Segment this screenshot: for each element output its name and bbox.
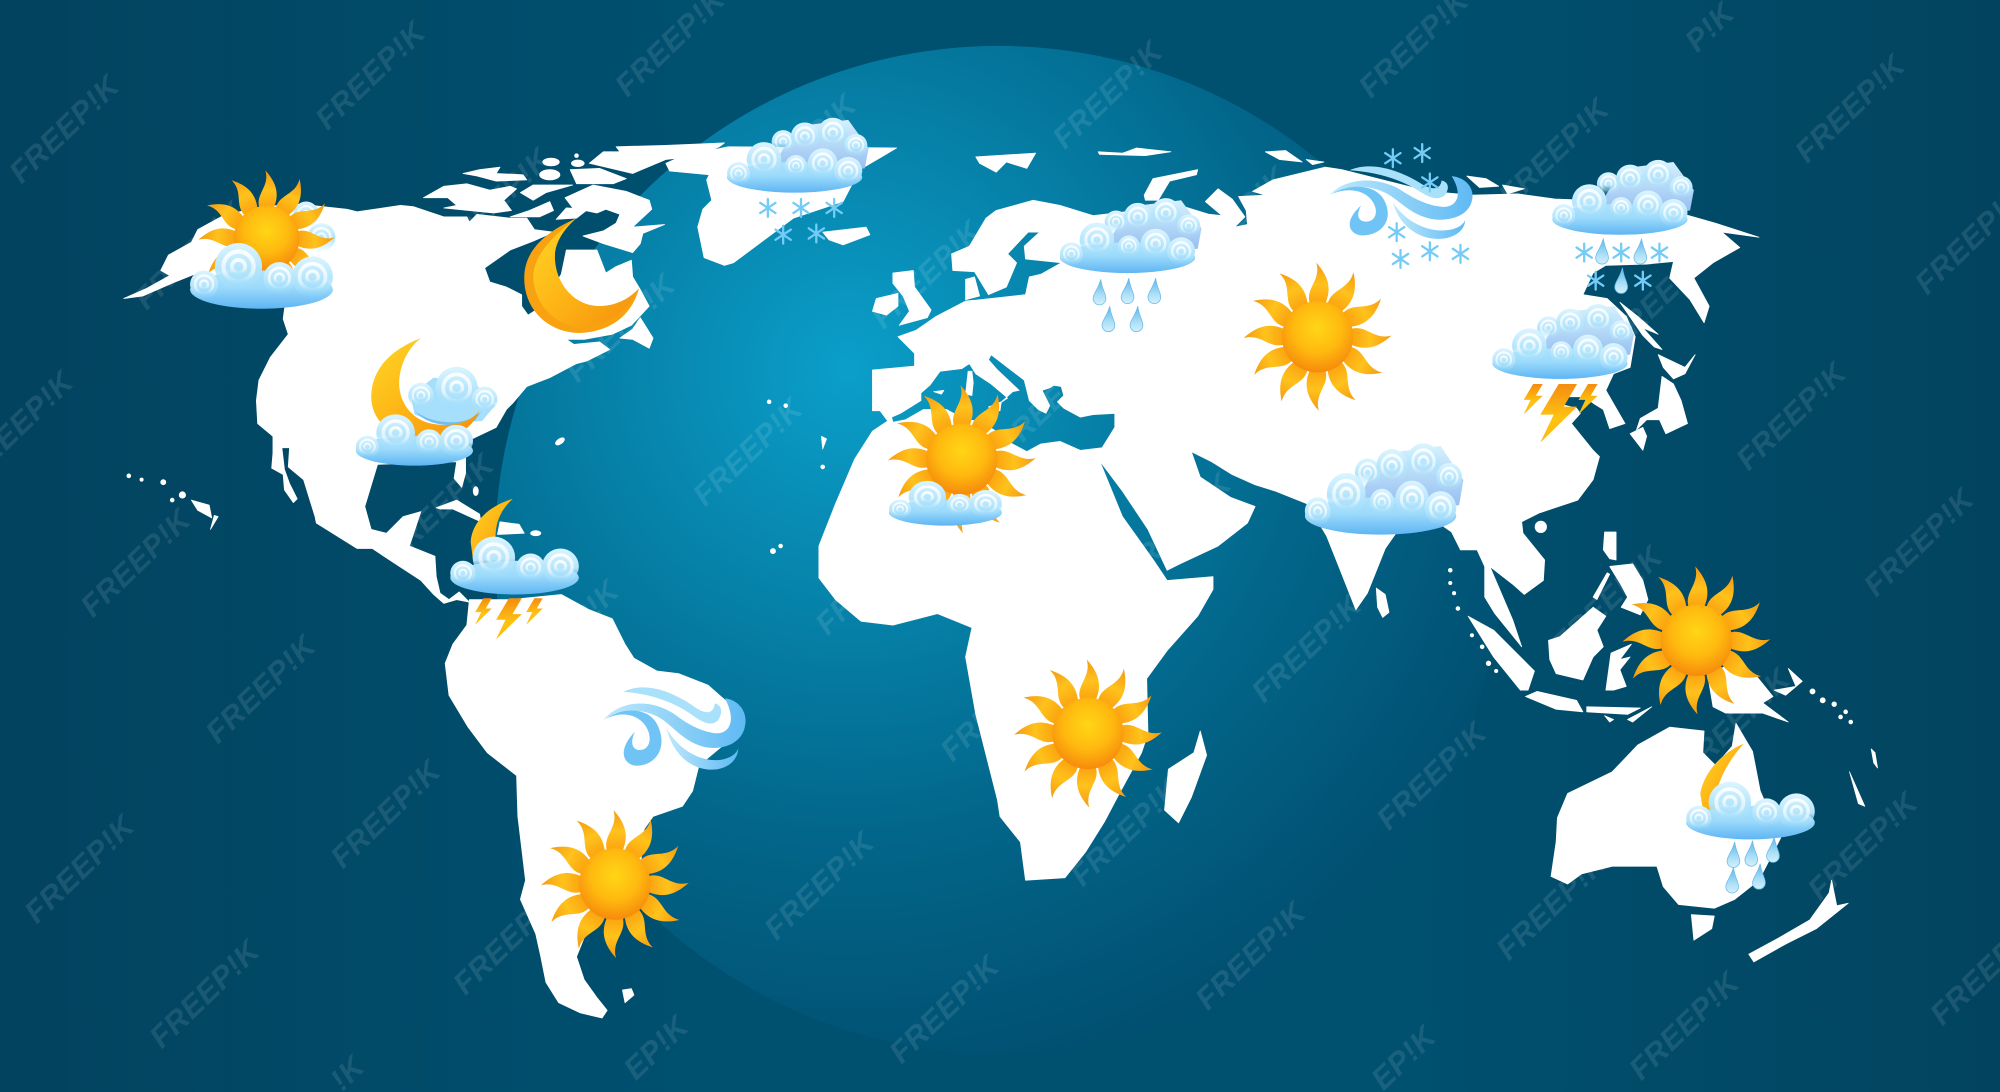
icon: lightning bolts xyxy=(475,598,543,639)
icon: Alaska sun behind cloud xyxy=(190,170,335,309)
watermarks: FREEP!K xyxy=(253,321,377,442)
icon: Australia moon, cloud and rain xyxy=(1686,744,1815,893)
landmass: Greenland xyxy=(666,147,897,265)
islands: Hawaii, Caribbean and Atlantic xyxy=(127,400,827,1003)
watermarks: FREEP!K xyxy=(143,933,267,1055)
watermarks: FREEP!K xyxy=(503,573,627,695)
watermarks: FREEP!K xyxy=(628,699,752,821)
watermarks: FREEP!K xyxy=(1857,481,1982,603)
watermarks: FREEP!K xyxy=(1046,34,1170,155)
island: New Zealand xyxy=(1749,880,1848,962)
watermarks: FREEP!K xyxy=(3,68,127,190)
icon: Southern Africa sun xyxy=(1014,660,1162,808)
landmass: Afro-Eurasia with the Mediterranean cut out xyxy=(819,167,1759,880)
watermarks: FREEP!K xyxy=(1490,845,1614,967)
islands: Mediterranean xyxy=(934,371,1001,411)
watermarks: FREEP!K xyxy=(128,194,252,316)
icon: Caribbean moon, cloud and lightning xyxy=(450,499,579,639)
watermarks: FREEP!K xyxy=(1623,965,1747,1087)
world map xyxy=(124,143,1878,1018)
watermarks: FREEP!K xyxy=(1171,160,1295,282)
watermarks: FREEP!K xyxy=(18,808,142,930)
icon: Asia sun xyxy=(1244,263,1392,411)
watermarks: FREEP!K xyxy=(740,87,864,209)
watermarks: FREEP!K xyxy=(309,14,433,136)
watermarks: FREEP!K xyxy=(1801,785,1926,907)
watermarks: FREEP!K xyxy=(74,502,199,623)
watermarks: FREEP!K xyxy=(1493,91,1617,213)
globe circle xyxy=(495,46,1503,1054)
island: Madagascar xyxy=(1165,731,1207,823)
watermarks: FREEP!K xyxy=(1370,715,1494,837)
watermarks: FREEP!K xyxy=(324,753,449,875)
watermarks: FREEP!K xyxy=(199,628,324,750)
icon: raindrops xyxy=(1093,278,1161,332)
watermarks: FREEP!K xyxy=(378,447,502,569)
watermarks: FREEP!K xyxy=(1115,466,1239,588)
watermarks: EP!K xyxy=(617,1008,696,1086)
landmass: Australia xyxy=(1551,723,1781,908)
watermarks: FREEP!K xyxy=(1064,771,1188,893)
icon: Siberia wind with snow xyxy=(1329,144,1473,268)
island: Iceland xyxy=(823,227,870,245)
watermarks: FREEP!K xyxy=(758,824,882,946)
islands: South-East Asia and Oceania xyxy=(1376,521,1878,806)
watermarks: FREEP!K xyxy=(809,520,933,641)
icon: Greenland snow cloud xyxy=(727,118,869,244)
islands: East Asia and Japan xyxy=(1620,302,1695,450)
watermarks: FREEP!K xyxy=(1546,539,1670,660)
landmass: North and Central America xyxy=(124,204,649,603)
watermarks: FREEP!K xyxy=(1296,286,1420,408)
watermarks: FREEP!K xyxy=(447,879,571,1001)
watermarks: FREEP!K xyxy=(1245,587,1369,709)
island: Tasmania xyxy=(1691,915,1714,940)
icon: South-East Asia sun xyxy=(1622,566,1770,714)
watermarks: FREEP!K xyxy=(1602,233,1727,354)
watermarks: FREEP!K xyxy=(1189,895,1313,1016)
islands: Britain, Ireland and the Arctic xyxy=(872,148,1524,325)
icon: snowflakes xyxy=(760,199,842,244)
watermarks: FREEP!K xyxy=(686,391,811,513)
watermarks: FREEP!K xyxy=(1788,48,1913,169)
watermarks: FREEP!K xyxy=(990,340,1114,461)
icon: India cloud xyxy=(1305,443,1463,535)
watermarks: FREEP!K xyxy=(559,267,683,389)
watermarks: FREEP!K xyxy=(1730,355,1854,477)
icon: Canada moon xyxy=(524,218,639,333)
icon: Far East cloud with snow and rain xyxy=(1552,160,1694,293)
watermarks: FREEP!K xyxy=(865,213,989,335)
icon: lightning bolts xyxy=(1524,384,1598,443)
icon: Europe rain cloud xyxy=(1060,198,1202,332)
icon: North Africa sun with cloud xyxy=(888,385,1036,533)
icon: China storm cloud xyxy=(1492,304,1634,443)
icon: South America wind xyxy=(603,687,746,770)
icon: Argentina sun xyxy=(541,810,689,958)
icon: USA moon with cloud xyxy=(356,338,497,466)
watermarks: FREEP!K xyxy=(1674,661,1798,783)
islands: Canadian Arctic xyxy=(423,143,724,348)
landmass: South America xyxy=(445,594,740,1018)
watermarks: FREEP!K xyxy=(934,646,1058,768)
watermarks: FREEP!K xyxy=(434,141,558,262)
watermarks: FREEP!K xyxy=(883,948,1007,1070)
watermarks: FREEP!K xyxy=(1421,412,1545,534)
